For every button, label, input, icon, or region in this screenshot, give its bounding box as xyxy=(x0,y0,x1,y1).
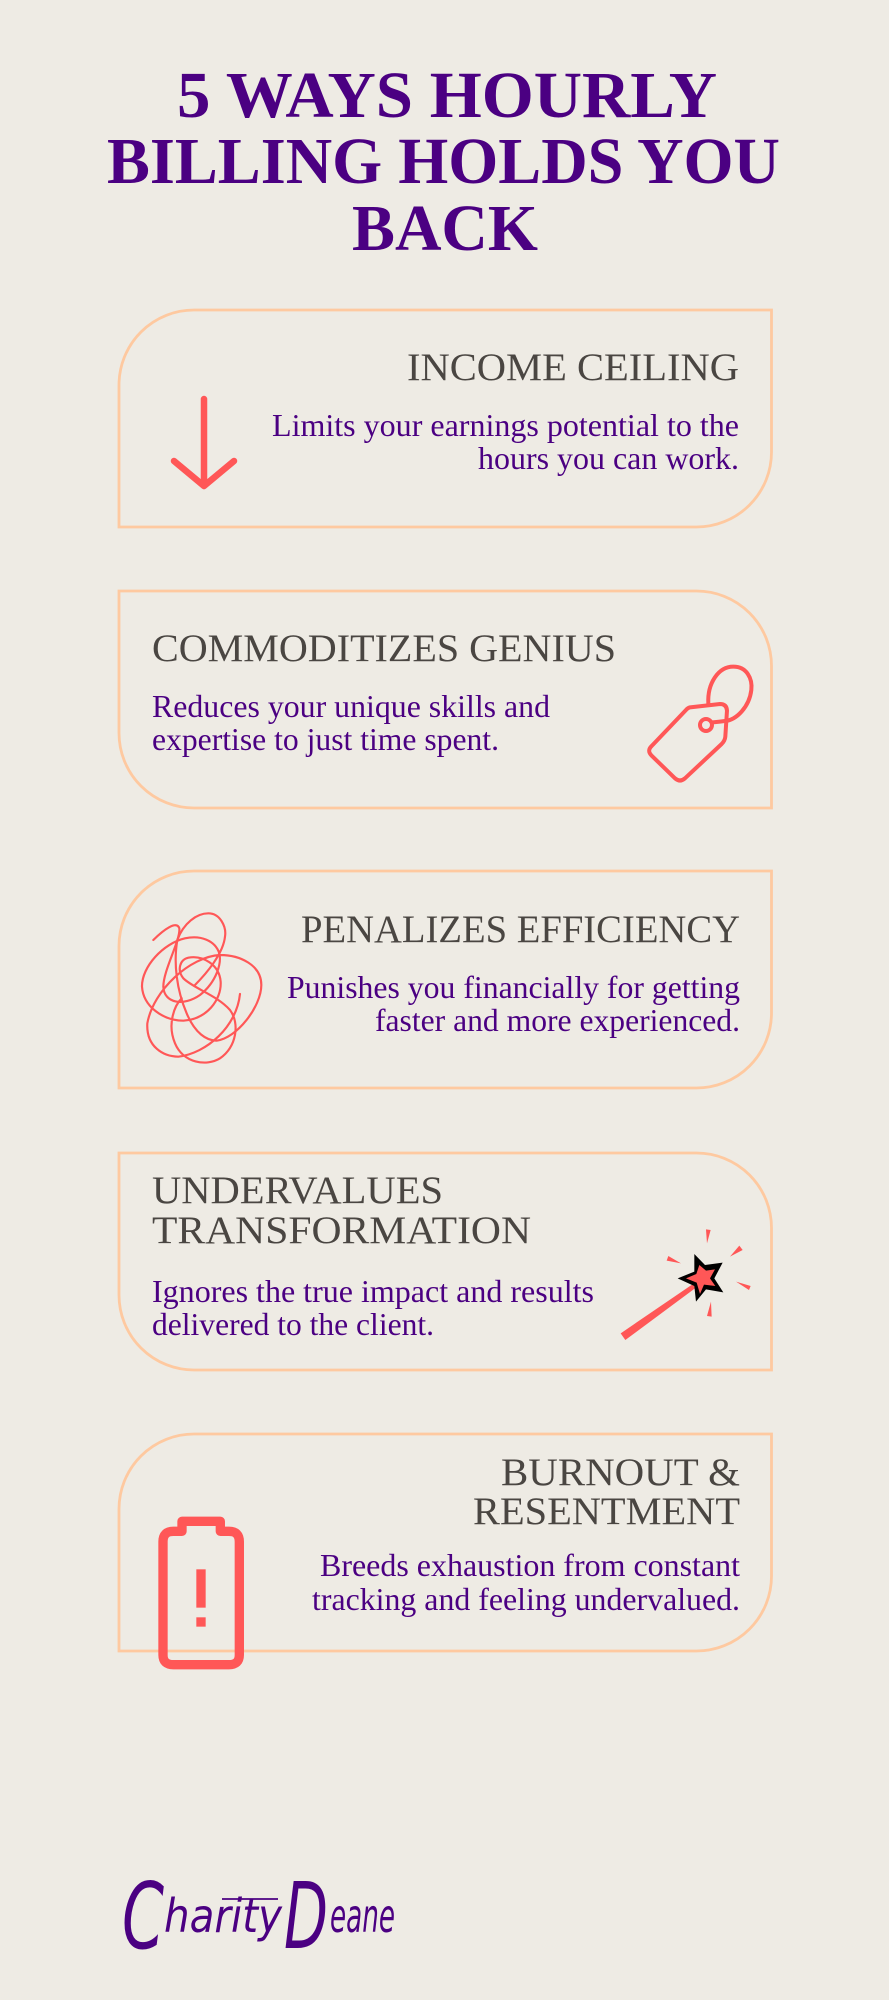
text: penalizes efficiency description: faster and more experienced. xyxy=(375,1002,740,1038)
title: 5 WAYS HOURLY xyxy=(177,59,717,132)
text: burnout and resentment description xyxy=(312,1547,740,1617)
heading: undervalues transformation xyxy=(152,1169,531,1252)
heading: undervalues transformation: UNDERVALUES xyxy=(152,1169,443,1212)
signature: Charity Deane: eane xyxy=(330,1889,395,1943)
icon: low battery warning xyxy=(163,1521,239,1665)
panel: undervalues transformation xyxy=(119,1153,772,1370)
heading: undervalues transformation: TRANSFORMATION xyxy=(152,1209,531,1252)
text: penalizes efficiency description xyxy=(287,969,740,1038)
signature: Charity Deane: C xyxy=(122,1863,164,1970)
heading: penalizes efficiency: PENALIZES EFFICIENCY xyxy=(301,908,740,951)
text: income ceiling description xyxy=(272,407,739,476)
text: burnout and resentment description: tracking and feeling undervalued. xyxy=(312,1581,740,1617)
text: commoditizes genius description xyxy=(152,688,550,757)
text: commoditizes genius description: expertise to just time spent. xyxy=(152,721,499,757)
icon: scribble xyxy=(142,913,261,1063)
text: penalizes efficiency description: Punishes you financially for getting xyxy=(287,969,740,1005)
heading: burnout and resentment: BURNOUT & xyxy=(501,1451,740,1494)
text: undervalues transformation description: Ignores the true impact and results xyxy=(152,1273,594,1309)
heading: income ceiling: INCOME CEILING xyxy=(407,346,739,389)
icon: magic wand xyxy=(621,1229,751,1340)
title: BILLING HOLDS YOU xyxy=(107,125,780,198)
heading: burnout and resentment xyxy=(473,1451,740,1533)
signature: Charity Deane: harity xyxy=(164,1889,283,1943)
icon: price tag xyxy=(649,667,752,780)
text: commoditizes genius description: Reduces your unique skills and xyxy=(152,688,550,724)
text: undervalues transformation description xyxy=(152,1273,594,1342)
title: BACK xyxy=(352,192,538,265)
signature: Charity Deane xyxy=(122,1863,395,1970)
icon: down arrow xyxy=(174,399,234,486)
heading: commoditizes genius: COMMODITIZES GENIUS xyxy=(152,627,616,670)
panel: income ceiling xyxy=(119,310,772,527)
panel: penalizes efficiency xyxy=(119,871,772,1088)
panel: commoditizes genius xyxy=(119,591,772,808)
text: undervalues transformation description: delivered to the client. xyxy=(152,1306,434,1342)
title xyxy=(107,59,780,265)
heading: burnout and resentment: RESENTMENT xyxy=(473,1490,740,1533)
panel: burnout and resentment xyxy=(119,1434,772,1665)
text: income ceiling description: Limits your earnings potential to the xyxy=(272,407,739,443)
signature: Charity Deane: D xyxy=(284,1863,328,1970)
text: burnout and resentment description: Breeds exhaustion from constant xyxy=(320,1547,740,1583)
text: income ceiling description: hours you can work. xyxy=(478,440,739,476)
